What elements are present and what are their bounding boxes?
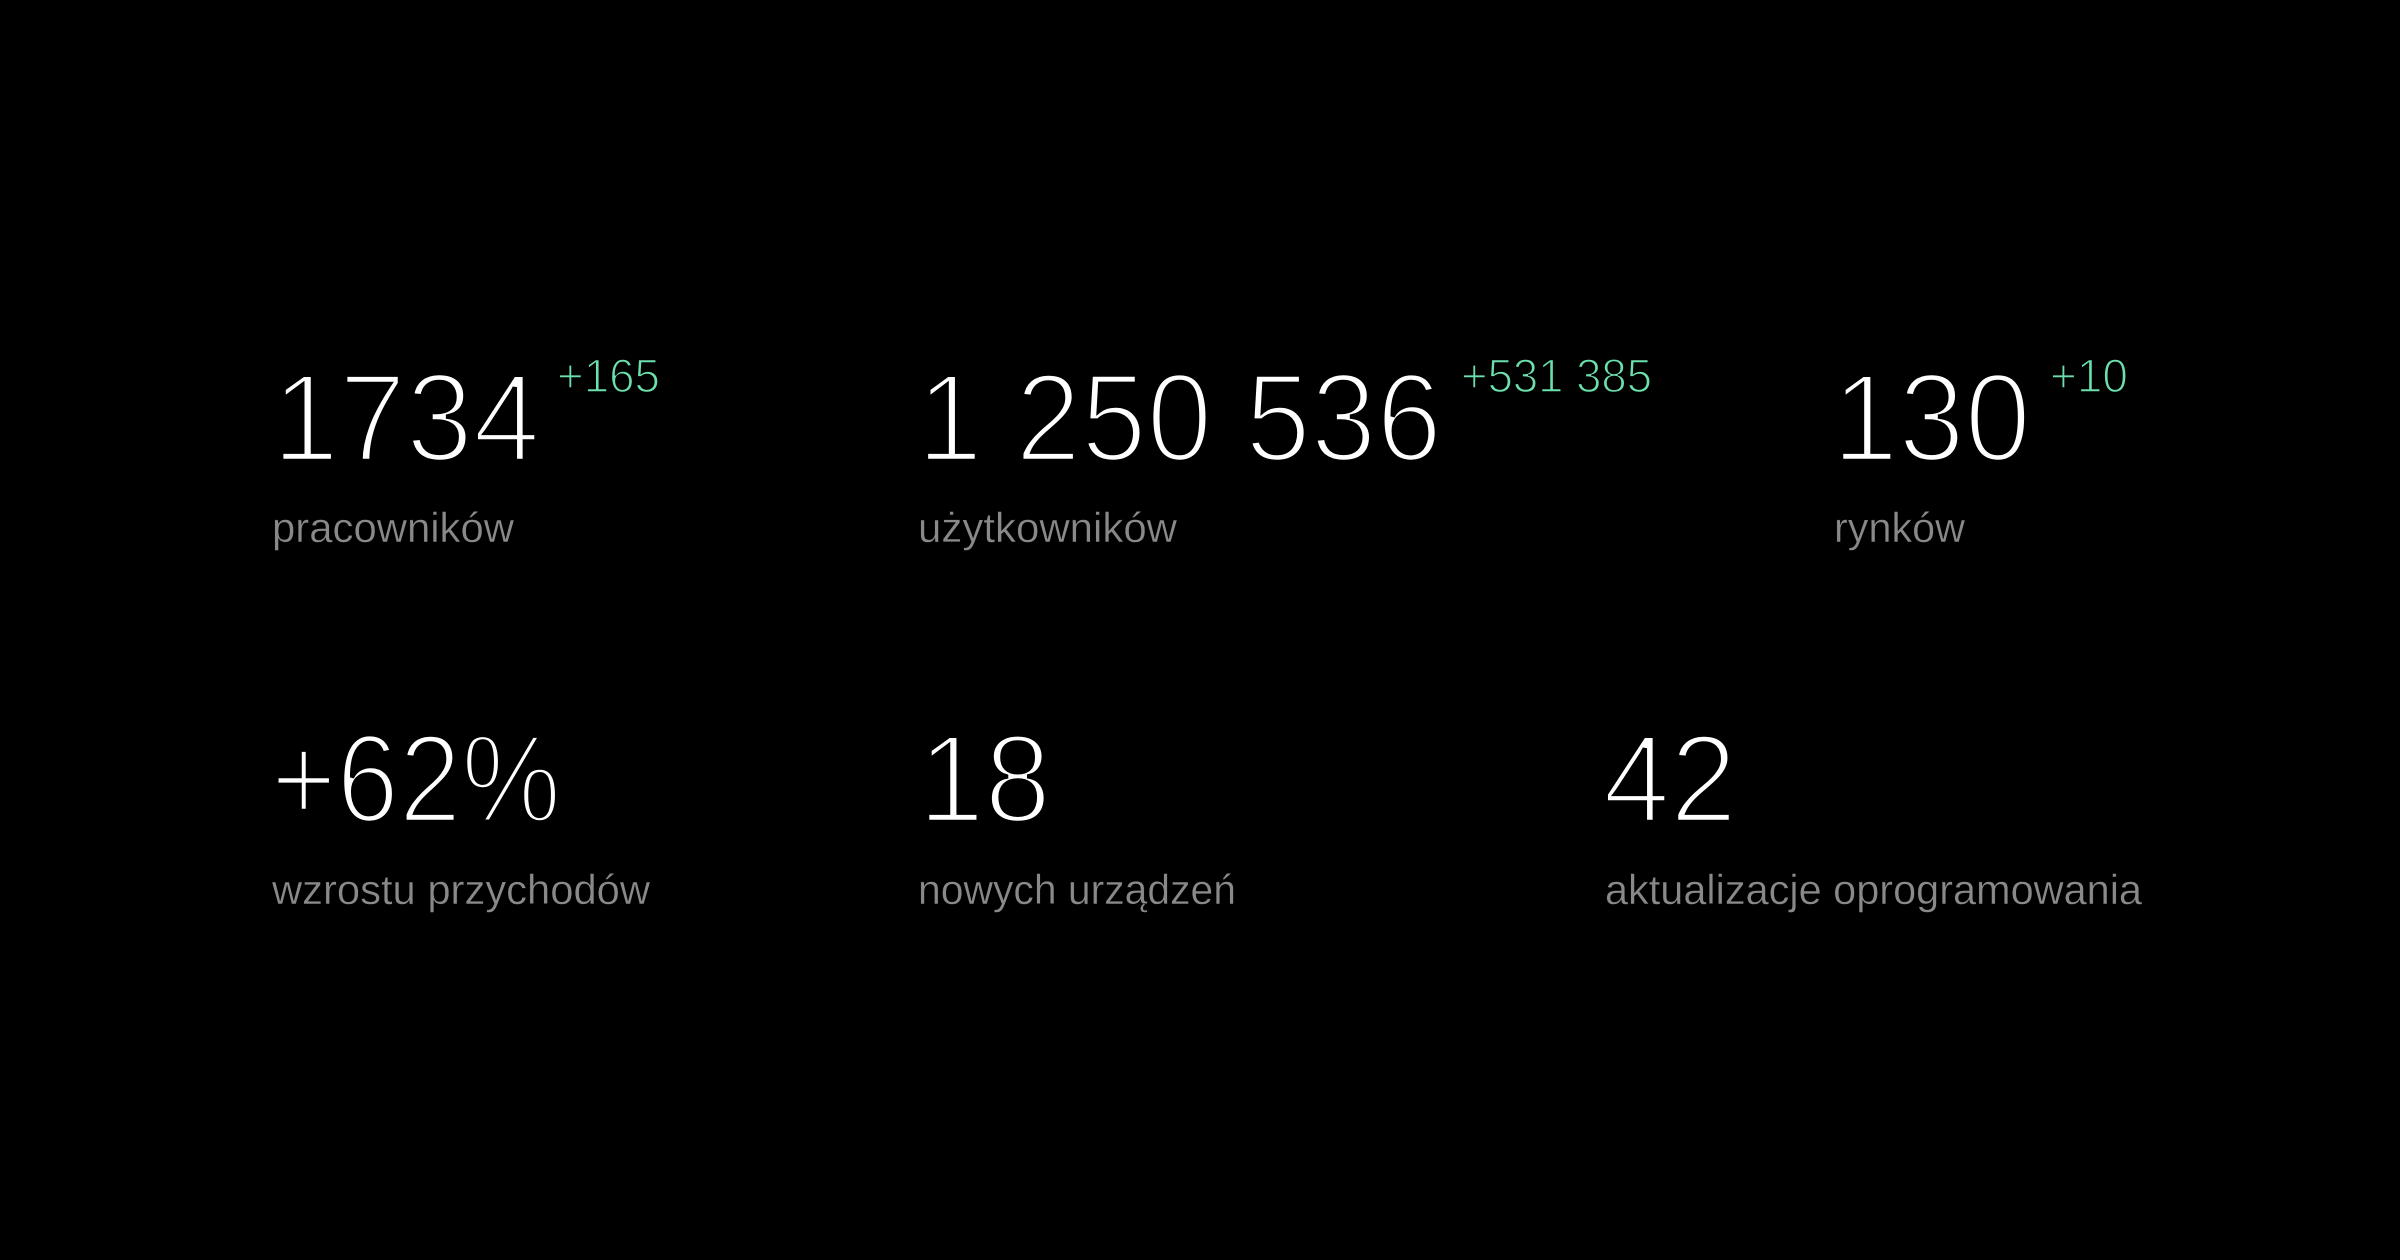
value: 18: 18 (918, 710, 1051, 849)
label: rynków: rynków (1834, 504, 1966, 551)
stat: markets (1832, 349, 2128, 551)
stat: revenue growth (271, 710, 651, 913)
value: 1734: 1734 (272, 349, 540, 488)
label: nowych urządzeń: nowych urządzeń (918, 866, 1236, 913)
delta: +531 385: +531 385 (1461, 349, 1652, 402)
stat: software updates (1603, 710, 2143, 913)
value: +62%: +62% (271, 710, 561, 849)
label: aktualizacje oprogramowania: aktualizacje oprogramowania (1605, 866, 2143, 913)
label: wzrostu przychodów: wzrostu przychodów (271, 866, 651, 913)
stat: employees (272, 349, 660, 551)
value: 130: 130 (1832, 349, 2031, 488)
delta: +165: +165 (557, 349, 660, 402)
stat: users (917, 349, 1652, 551)
value: 42: 42 (1603, 710, 1737, 849)
label: pracowników: pracowników (272, 504, 515, 551)
label: użytkowników: użytkowników (918, 504, 1178, 551)
value: 1 250 536: 1 250 536 (917, 349, 1442, 488)
stat: new devices (918, 710, 1236, 913)
delta: +10: +10 (2050, 349, 2128, 402)
